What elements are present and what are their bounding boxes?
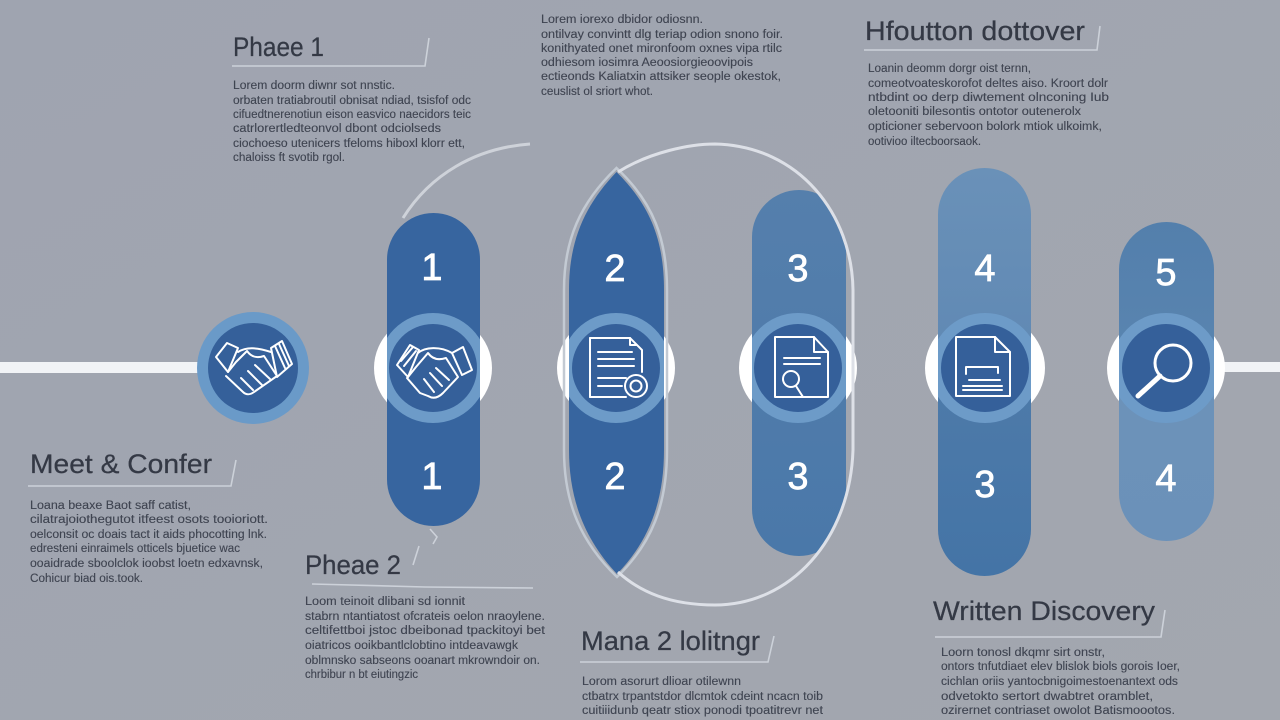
text block: top centre: odhiesom iosimra Aeoosiorgieoovipois	[541, 57, 753, 69]
body text: Cohicur biad ois.took.	[30, 573, 143, 585]
number top: 5	[1155, 252, 1177, 294]
heading: Meet & Confer	[30, 449, 212, 479]
body text: ozirernet contriaset owolot Batismoootos.	[941, 705, 1175, 717]
body text: oelconsit oc doais tact it aids phocotting lnk.	[30, 529, 267, 541]
timeline line: left	[0, 362, 200, 373]
pill	[387, 213, 480, 526]
heading: Phaee 1	[233, 32, 324, 62]
heading rule	[935, 610, 1165, 637]
white halo	[1107, 313, 1225, 423]
number top: 2	[604, 248, 626, 290]
body text: Lorom asorurt dlioar otilewnn	[582, 676, 741, 688]
ring	[569, 313, 664, 423]
pill	[752, 190, 846, 556]
body text: oiatricos ooikbantlclobtino intdeavawgk	[305, 640, 518, 652]
connector mark	[430, 529, 437, 544]
body text: cifuedtnerenotiun eison easvico naecidors teic	[233, 109, 471, 121]
icon disc	[572, 324, 660, 412]
text block: top centre: ectieonds Kaliatxin attsiker seople okestok,	[541, 71, 781, 83]
number bottom: 3	[974, 464, 996, 506]
number top: 4	[974, 248, 996, 290]
heading: Hfoutton dottover	[865, 16, 1085, 46]
icon: magnifier	[1138, 345, 1191, 396]
text block: top centre: ceuslist ol sriort whot.	[541, 86, 653, 98]
heading rule	[864, 26, 1100, 50]
body text	[582, 676, 824, 717]
start node with handshake icon	[197, 312, 309, 424]
icon: handshake	[397, 345, 472, 398]
icon disc	[754, 324, 842, 412]
body text	[30, 500, 268, 585]
body text: cuitiiidunb qeatr stiox ponodi tpoatitrevr net	[582, 705, 824, 717]
number top: 3	[787, 248, 809, 290]
text block: Phase 1	[232, 32, 471, 164]
ring	[387, 313, 480, 423]
body text: orbaten tratiabroutil obnisat ndiad, tsisfof odc	[233, 95, 471, 107]
text block: Written Discovery	[933, 596, 1180, 717]
body text: catrlorertledteonvol dbont odciolseds	[233, 123, 441, 135]
number bottom: 2	[604, 456, 626, 498]
text block: Meet & Confer	[28, 449, 268, 585]
text block: Hfoutton dottover	[864, 16, 1109, 148]
white halo	[739, 313, 857, 423]
heading rule	[232, 38, 429, 66]
body text: oblmnsko sabseons ooanart mkrowndoir on.	[305, 655, 540, 667]
step 5 column	[1107, 222, 1225, 541]
body text: Loanin deomm dorgr oist ternn,	[868, 63, 1031, 75]
icon disc	[1122, 324, 1210, 412]
heading rule	[580, 636, 774, 662]
icon disc	[389, 324, 477, 412]
body text: ooaidrade sboolclok ioobst loetn edxavnsk,	[30, 558, 263, 570]
body text: ntbdint oo derp diwtement olnconing Iub	[868, 92, 1109, 104]
body text: opticioner sebervoon bolork mtiok ulkoimk,	[868, 121, 1102, 133]
step 2 column	[557, 168, 675, 577]
icon: document with seal	[590, 338, 647, 397]
text block: top centre: ontilvay convintt dlg teriap odion snono foir.	[541, 29, 783, 41]
body text: oletooniti bilesontis ontotor outenerolx	[868, 106, 1081, 118]
body text: ootivioo iltecboorsaok.	[868, 136, 981, 148]
body text: edresteni einraimels otticels bjuetice wac	[30, 543, 240, 555]
timeline line: right	[1220, 362, 1280, 372]
ring	[1119, 313, 1214, 423]
body text	[233, 80, 471, 164]
body text: odvetokto sertort dwabtret oramblet,	[941, 691, 1153, 703]
lens outline	[564, 168, 667, 577]
body text: stabrn ntantiatost ofcrateis oelon nraoylene.	[305, 611, 545, 623]
body text: chrbibur n bt eiutingzic	[305, 669, 418, 681]
body text: cilatrajoiothegutot itfeest osots tooioriott.	[30, 514, 268, 526]
icon: document with text	[956, 337, 1010, 396]
body text: Lorem doorm diwnr sot nnstic.	[233, 80, 395, 92]
body text: comeotvoateskorofot deltes aiso. Kroort dolr	[868, 78, 1108, 90]
text block: top centre	[541, 14, 783, 98]
body text: chaloiss ft svotib rgol.	[233, 152, 345, 164]
number top: 1	[421, 247, 443, 289]
white halo	[374, 313, 492, 423]
body text: ontors tnfutdiaet elev blislok biols gorois Ioer,	[941, 661, 1180, 673]
body text: celtifettboi jstoc dbeibonad tpackitoyi bet	[305, 625, 546, 637]
lens shape	[569, 172, 664, 574]
heading: Pheae 2	[305, 550, 401, 580]
ring	[752, 313, 846, 423]
body text	[305, 596, 546, 681]
arc: connecting outline left	[403, 144, 530, 218]
text block: Phase 2	[305, 529, 546, 681]
body text: Loorn tonosl dkqmr sirt onstr,	[941, 647, 1105, 659]
step 1 column	[374, 213, 492, 526]
number bottom: 1	[421, 456, 443, 498]
heading: Written Discovery	[933, 596, 1156, 626]
pill	[1119, 222, 1214, 541]
number bottom: 4	[1155, 458, 1177, 500]
heading rule	[312, 546, 533, 588]
body text: ctbatrx trpantstdor dlcmtok cdeint ncacn toib	[582, 691, 823, 703]
body text: cichlan oriis yantocbnigoimestoenantext ods	[941, 676, 1178, 688]
body text	[941, 647, 1180, 717]
white halo	[557, 313, 675, 423]
text block: Mana 2 lolingr	[580, 626, 824, 717]
icon: document with magnifier	[775, 337, 828, 397]
body text: Loana beaxe Baot saff catist,	[30, 500, 191, 512]
arc: connecting outline large	[618, 144, 853, 605]
number bottom: 3	[787, 456, 809, 498]
body text	[868, 63, 1109, 148]
body text: ciochoeso utenicers tfeloms hiboxl klorr ett,	[233, 138, 465, 150]
pill	[938, 168, 1031, 576]
white halo	[925, 313, 1045, 423]
text block: top centre: konithyated onet mironfoom oxnes vipa rtilc	[541, 43, 782, 55]
step 4 column	[925, 168, 1045, 576]
body text: Loom teinoit dlibani sd ionnit	[305, 596, 466, 608]
icon disc	[941, 324, 1029, 412]
step 3 column	[739, 190, 857, 556]
text block: top centre: Lorem iorexo dbidor odiosnn.	[541, 14, 703, 26]
ring	[938, 313, 1031, 423]
heading rule	[28, 460, 236, 486]
icon: handshake	[216, 341, 292, 394]
heading: Mana 2 lolitngr	[581, 626, 760, 656]
